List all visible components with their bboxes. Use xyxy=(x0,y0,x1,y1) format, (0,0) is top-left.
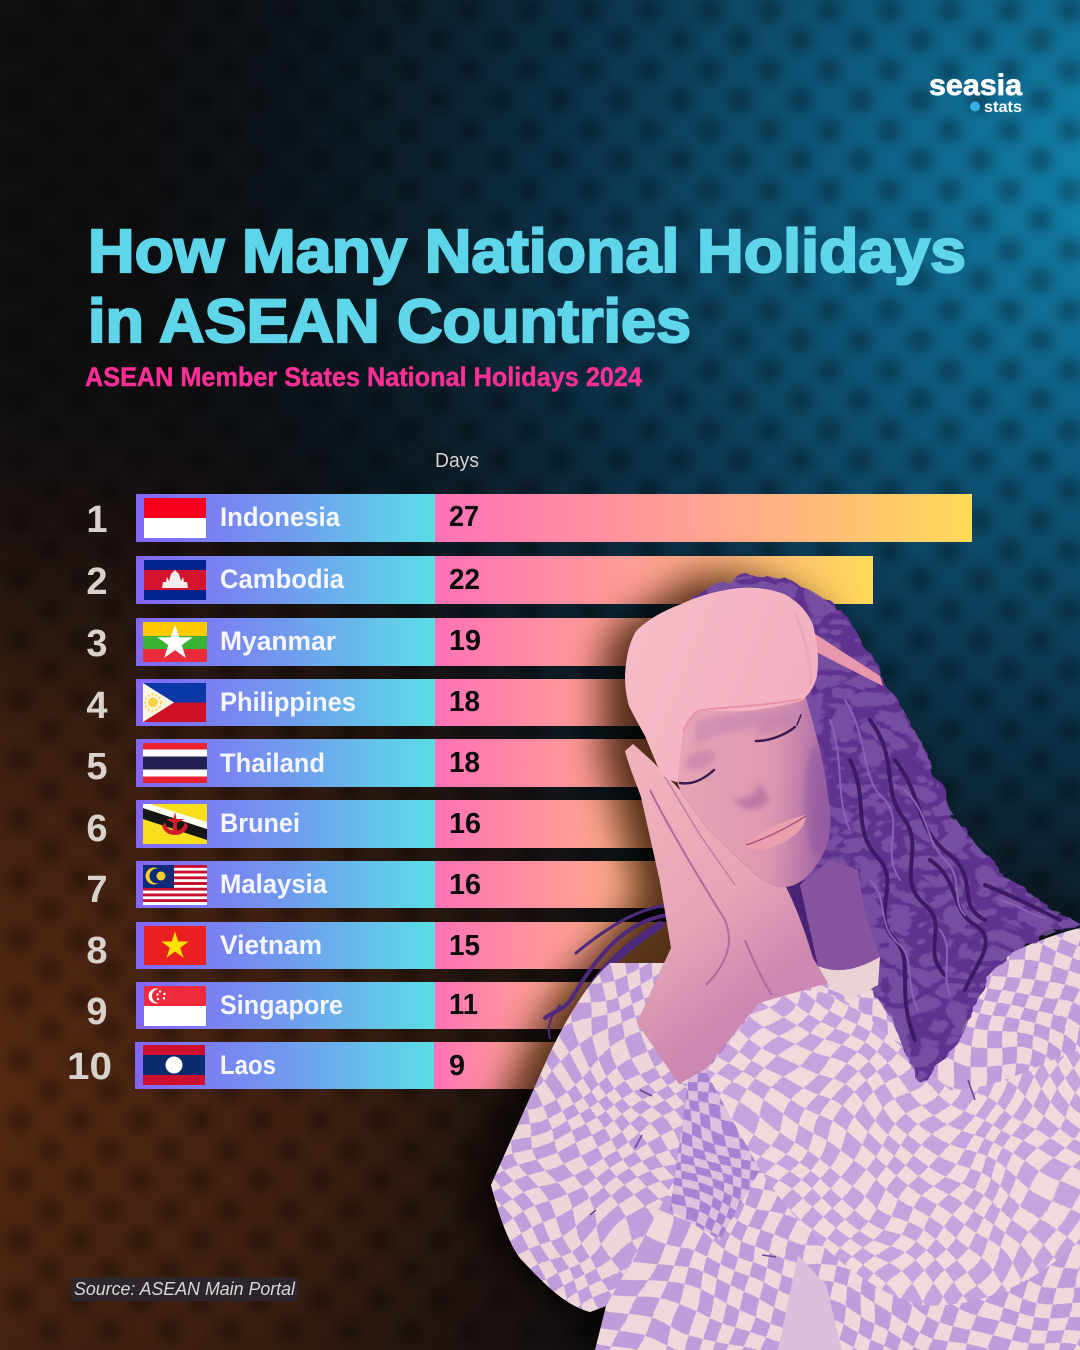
row 2: Cambodia xyxy=(136,556,873,604)
row 3: Myanmar xyxy=(136,618,813,666)
strap xyxy=(812,632,883,686)
hair backing behind neck and hands xyxy=(770,850,870,990)
row 8: Vietnam: Vietnam xyxy=(220,930,322,960)
rank 10: 10 xyxy=(67,1046,112,1088)
lower inner shirt xyxy=(778,1255,842,1350)
row 6: Brunei xyxy=(136,800,753,848)
gap between wrists xyxy=(733,925,775,1005)
rank 9: 9 xyxy=(86,991,108,1033)
logo: seasia stats: seasia xyxy=(929,69,1022,102)
fold lines xyxy=(590,1080,975,1257)
nose xyxy=(733,782,770,809)
row 8: Vietnam xyxy=(136,922,733,969)
face xyxy=(670,695,831,887)
neck xyxy=(800,860,880,970)
row 4: Philippines: 18 xyxy=(449,686,480,718)
row 9: Singapore: 11 xyxy=(449,989,478,1021)
row 7: Malaysia: Malaysia xyxy=(220,869,328,899)
row 5: Thailand: Thailand xyxy=(220,748,325,778)
hair curl texture xyxy=(680,570,1080,1090)
row 2: Cambodia: Cambodia xyxy=(220,564,345,594)
source: Source: ASEAN Main Portal xyxy=(74,1279,296,1299)
logo: seasia stats xyxy=(929,69,1022,116)
row 7: Malaysia xyxy=(136,861,753,908)
flag: Singapore xyxy=(144,986,206,1026)
row 3: Myanmar: 19 xyxy=(449,625,481,657)
row 4: Philippines: Philippines xyxy=(220,687,356,717)
row 5: Thailand xyxy=(136,739,793,787)
rank 2: 2 xyxy=(86,561,108,603)
eyes and brows xyxy=(680,715,801,783)
axis label: Days: Days xyxy=(435,450,479,472)
hair xyxy=(690,576,1080,1082)
row 10: Laos: 9 xyxy=(449,1050,465,1082)
row 5: Thailand: 18 xyxy=(449,747,480,779)
row 10: Laos xyxy=(135,1042,614,1089)
photo: woman with sleep mask xyxy=(440,570,1080,1350)
hair strands behind shoulder xyxy=(545,905,668,1038)
title: in ASEAN Countries xyxy=(88,287,691,355)
flag: Philippines xyxy=(143,683,206,722)
lips xyxy=(744,815,806,850)
rank 7: 7 xyxy=(86,869,108,911)
flag: Myanmar xyxy=(143,622,207,662)
flag: Cambodia xyxy=(144,560,206,600)
sleep mask xyxy=(625,588,818,782)
face shading xyxy=(682,705,827,855)
row 8: Vietnam: 15 xyxy=(449,930,480,962)
row 9: Singapore xyxy=(136,982,654,1029)
rank 4: 4 xyxy=(86,685,108,727)
title xyxy=(88,217,966,355)
flag: Malaysia xyxy=(143,865,207,905)
hands and forearm xyxy=(625,744,828,1084)
row 4: Philippines xyxy=(136,679,793,726)
row 2: Cambodia: 22 xyxy=(449,564,480,596)
rank 6: 6 xyxy=(86,808,108,850)
rank 1: 1 xyxy=(86,499,108,541)
flag: Indonesia xyxy=(144,498,206,538)
row 10: Laos: Laos xyxy=(220,1050,276,1080)
row 1: Indonesia xyxy=(136,494,972,542)
rank 5: 5 xyxy=(86,746,108,788)
row 1: Indonesia: 27 xyxy=(449,501,479,533)
hair curls xyxy=(830,700,1060,1040)
flag: Vietnam xyxy=(144,926,206,965)
rank 8: 8 xyxy=(86,930,108,972)
row 9: Singapore: Singapore xyxy=(220,990,343,1020)
row 1: Indonesia: Indonesia xyxy=(220,502,341,532)
row 6: Brunei: Brunei xyxy=(220,808,300,838)
t-shirt collar xyxy=(818,957,880,1000)
flag: Thailand xyxy=(143,743,207,783)
jacket xyxy=(491,928,1080,1350)
person soft shadow xyxy=(466,574,1055,1350)
subtitle: ASEAN Member States National Holidays 2024 xyxy=(85,362,642,392)
row 3: Myanmar: Myanmar xyxy=(220,626,336,656)
flag: Laos xyxy=(143,1045,205,1085)
title: How Many National Holidays xyxy=(88,217,966,285)
logo: seasia stats: stats xyxy=(984,99,1022,116)
rank 3: 3 xyxy=(86,623,108,665)
row 7: Malaysia: 16 xyxy=(449,869,481,901)
flag: Brunei xyxy=(143,804,207,844)
row 6: Brunei: 16 xyxy=(449,808,481,840)
